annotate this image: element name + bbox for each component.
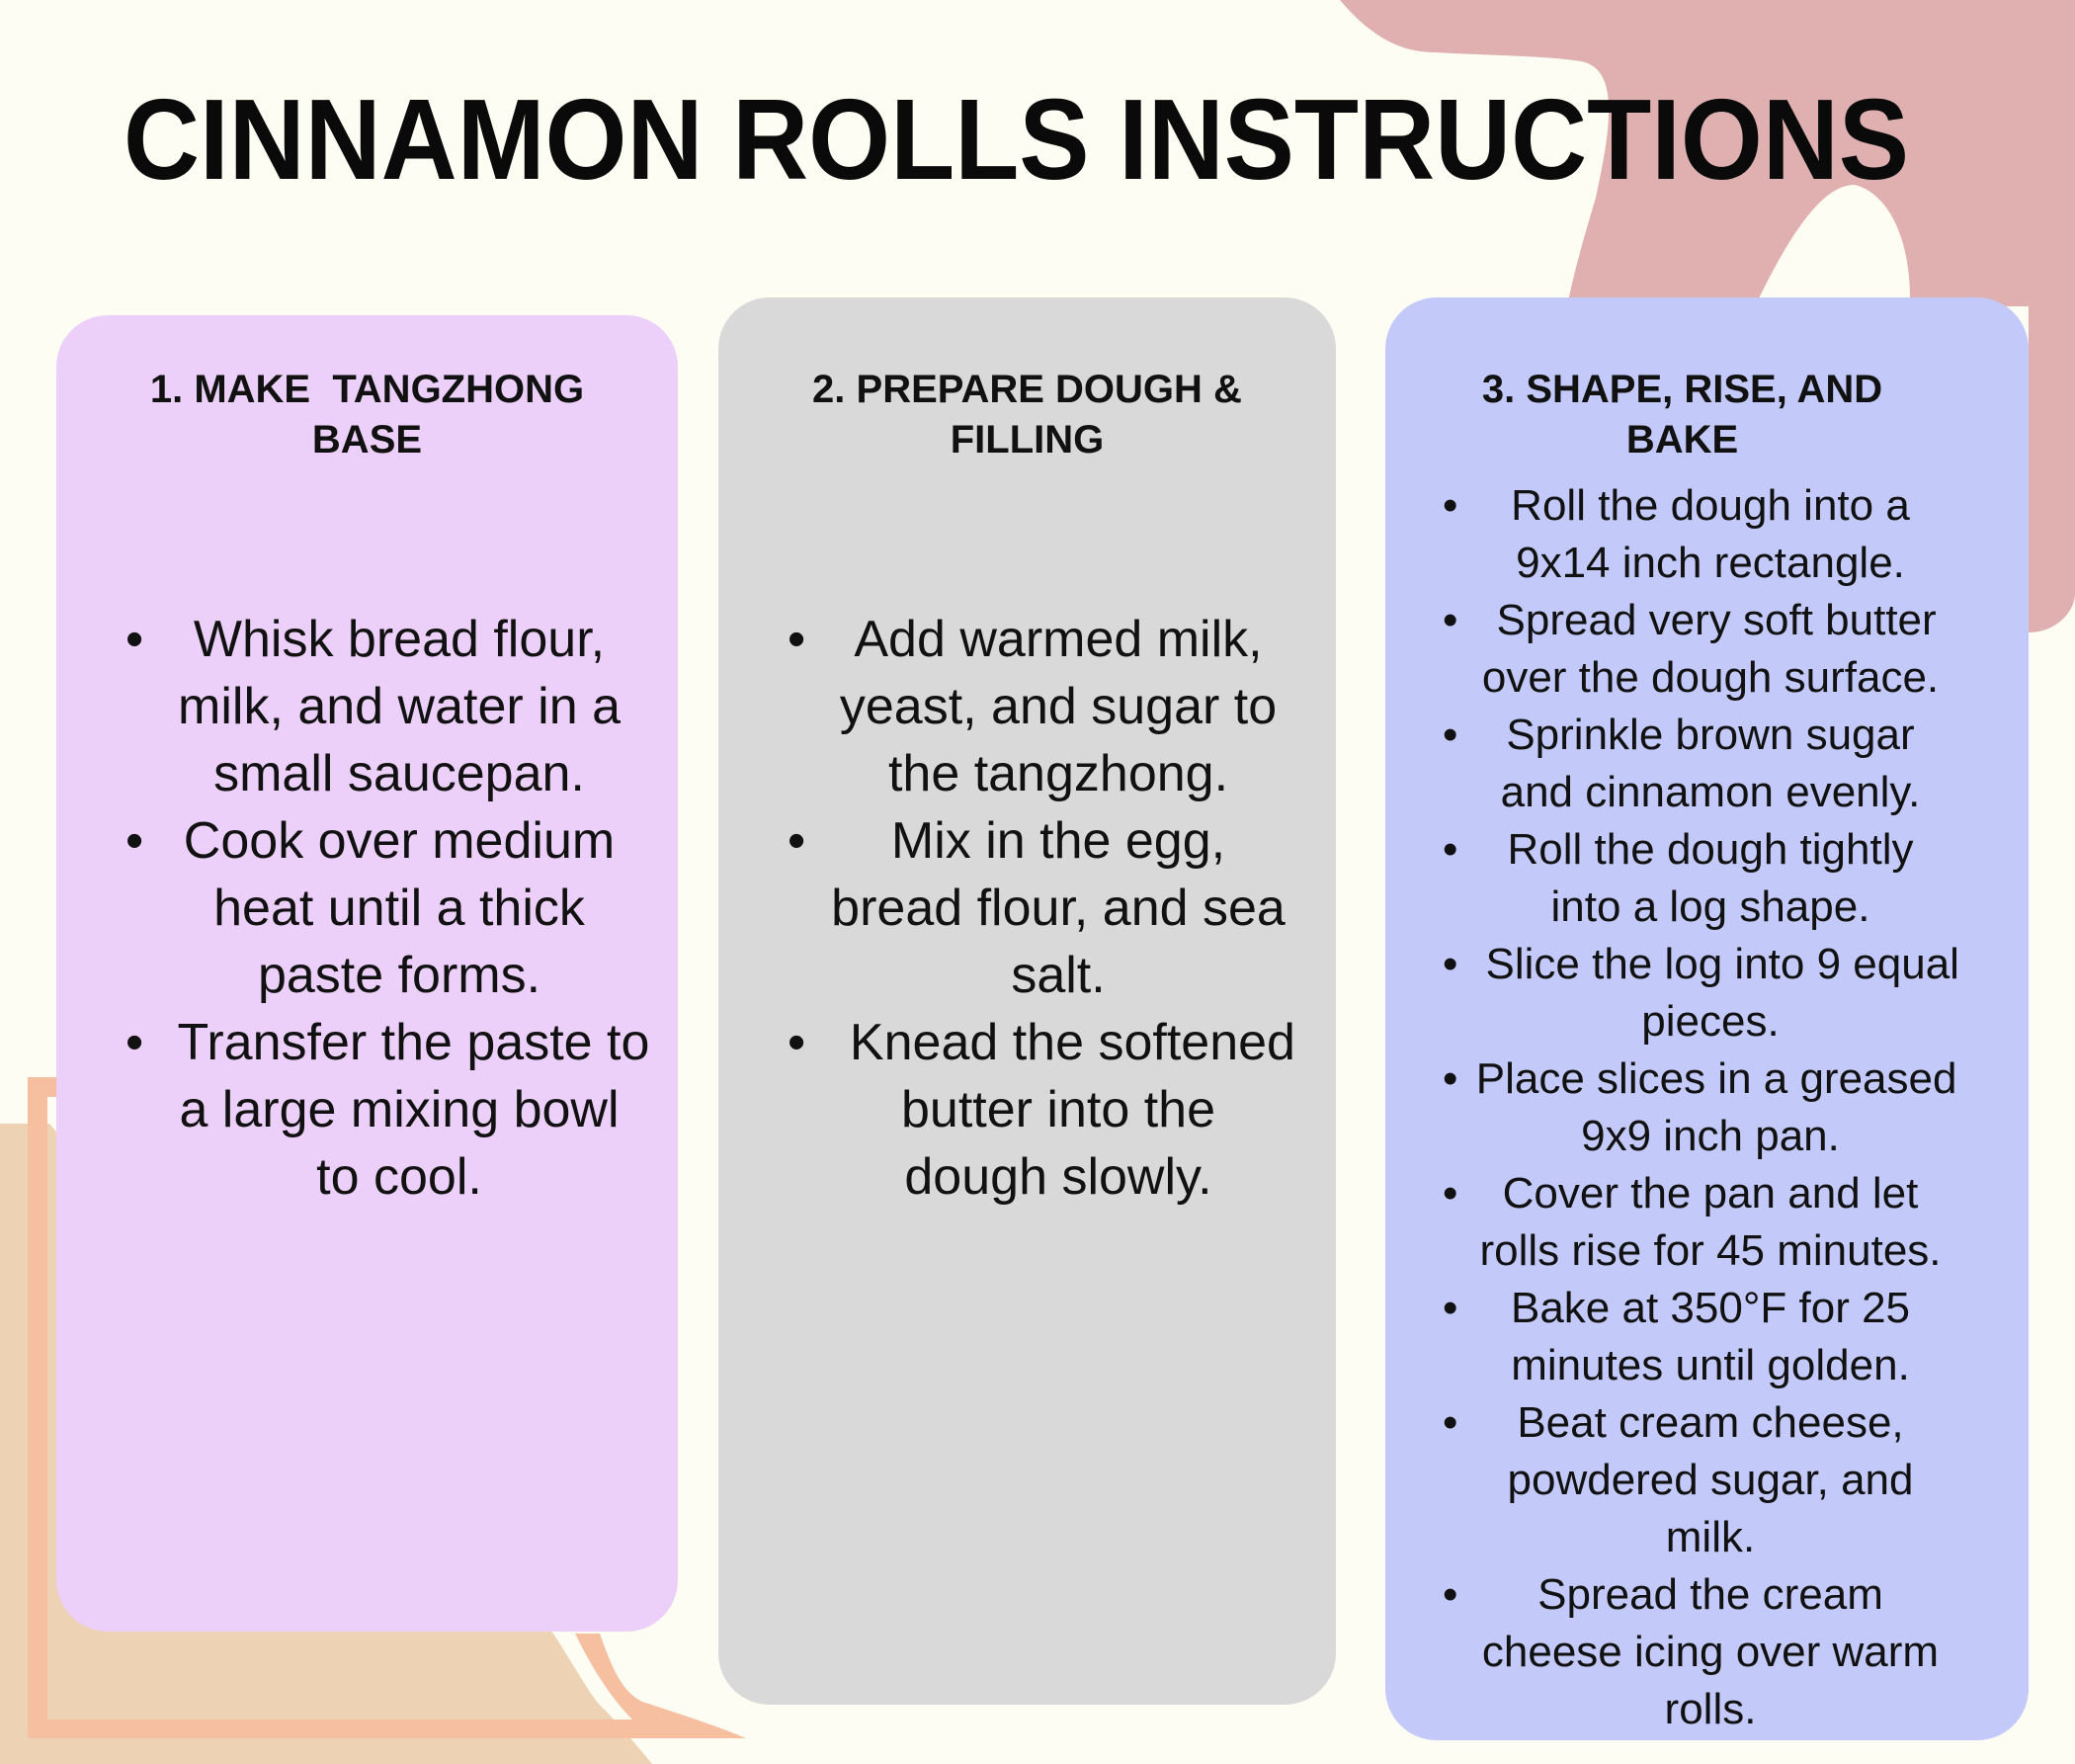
- heading: step 3: [1482, 368, 1882, 462]
- bullet list: step 1: [127, 611, 649, 1206]
- bullet list: step 2: bread flour, and sea: [831, 880, 1286, 937]
- bullet list: step 3: pieces.: [1641, 997, 1780, 1046]
- bullet list: step 2: Knead the softened: [850, 1014, 1295, 1071]
- bullet list: step 3: Roll the dough into a: [1511, 481, 1910, 530]
- bullet list: step 1: Cook over medium: [184, 812, 615, 870]
- heading: step 2: FILLING: [951, 418, 1104, 462]
- bullet list: step 1: heat until a thick: [213, 880, 585, 937]
- bullet list: step 3: 9x14 inch rectangle.: [1516, 539, 1905, 587]
- bullet list: step 1: small saucepan.: [213, 745, 585, 802]
- bullet list: step 3: Cover the pan and let: [1503, 1169, 1918, 1218]
- bullet list: step 2: Add warmed milk,: [854, 611, 1263, 668]
- bullet list: step 3: rolls rise for 45 minutes.: [1479, 1226, 1942, 1275]
- bullet list: step 3: over the dough surface.: [1482, 653, 1939, 702]
- bullet list: step 3: Roll the dough tightly: [1508, 825, 1913, 874]
- bullet list: step 3: minutes until golden.: [1511, 1341, 1910, 1389]
- bullet list: step 2: yeast, and sugar to: [840, 678, 1277, 735]
- bullet list: step 3: 9x9 inch pan.: [1581, 1112, 1840, 1160]
- bullet list: step 1: a large mixing bowl: [179, 1081, 620, 1138]
- bullet list: step 3: Place slices in a greased: [1476, 1054, 1956, 1103]
- bullet list: step 3: powdered sugar, and: [1508, 1456, 1913, 1504]
- bullet list: step 3: cheese icing over warm: [1482, 1628, 1939, 1676]
- bullet list: step 2: the tangzhong.: [888, 745, 1228, 802]
- bullet list: step 3: and cinnamon evenly.: [1501, 768, 1920, 816]
- bullet list: step 2: salt.: [1011, 947, 1106, 1004]
- bullet list: step 1: Transfer the paste to: [178, 1014, 649, 1071]
- bullet list: step 2: butter into the: [901, 1081, 1215, 1138]
- bullet list: step 3: into a log shape.: [1551, 882, 1869, 931]
- panel: make tangzhong base: [56, 315, 678, 1632]
- heading: step 1: BASE: [312, 418, 422, 462]
- bullet list: step 3: Sprinkle brown sugar: [1506, 711, 1915, 759]
- bullet list: step 2: [789, 611, 1295, 1206]
- bullet list: step 3: [1445, 481, 1959, 1733]
- panel: prepare dough & filling: [718, 297, 1336, 1705]
- heading: step 2: 2. PREPARE DOUGH &: [812, 368, 1242, 411]
- heading: step 3: BAKE: [1626, 418, 1738, 462]
- bullet list: step 3: Slice the log into 9 equal: [1485, 940, 1959, 988]
- bullet list: step 1: to cool.: [316, 1148, 482, 1206]
- bullet list: step 3: milk.: [1666, 1513, 1755, 1561]
- heading: step 1: 1. MAKE TANGZHONG: [150, 368, 584, 411]
- panel: shape, rise, and bake: [1385, 297, 2029, 1740]
- bullet list: step 3: Bake at 350°F for 25: [1511, 1284, 1910, 1332]
- heading: step 2: [812, 368, 1242, 462]
- bullet list: step 3: Spread very soft butter: [1497, 596, 1937, 644]
- bullet list: step 1: Whisk bread flour,: [194, 611, 605, 668]
- heading: step 1: [150, 368, 584, 462]
- bullet list: step 2: dough slowly.: [904, 1148, 1212, 1206]
- bullet list: step 3: Spread the cream: [1537, 1570, 1883, 1619]
- bullet list: step 1: paste forms.: [258, 947, 540, 1004]
- bullet list: step 3: Beat cream cheese,: [1517, 1398, 1904, 1447]
- bullet list: step 3: rolls.: [1665, 1685, 1756, 1733]
- bullet list: step 2: Mix in the egg,: [891, 812, 1225, 870]
- heading: step 3: 3. SHAPE, RISE, AND: [1482, 368, 1882, 411]
- bullet list: step 1: milk, and water in a: [178, 678, 621, 735]
